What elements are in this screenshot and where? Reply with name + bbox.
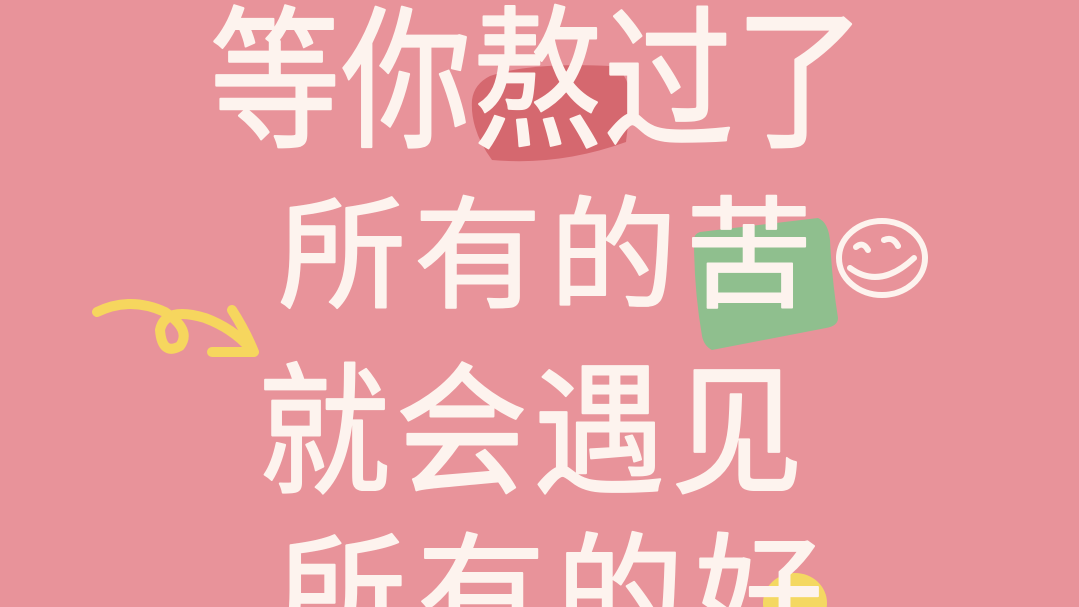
heading line 3: 就会遇见 [258,354,803,513]
highlight: yellow patch behind 好 [763,573,827,607]
arrow: yellow looped arrow [97,304,254,352]
heading line 1: 等你熬过了 [210,0,865,168]
icon: smiley face [839,221,925,295]
highlight: red patch behind 熬 [472,65,630,161]
highlight: green patch behind 苦 [694,218,838,350]
heading line 2: 所有的苦 [278,189,813,324]
